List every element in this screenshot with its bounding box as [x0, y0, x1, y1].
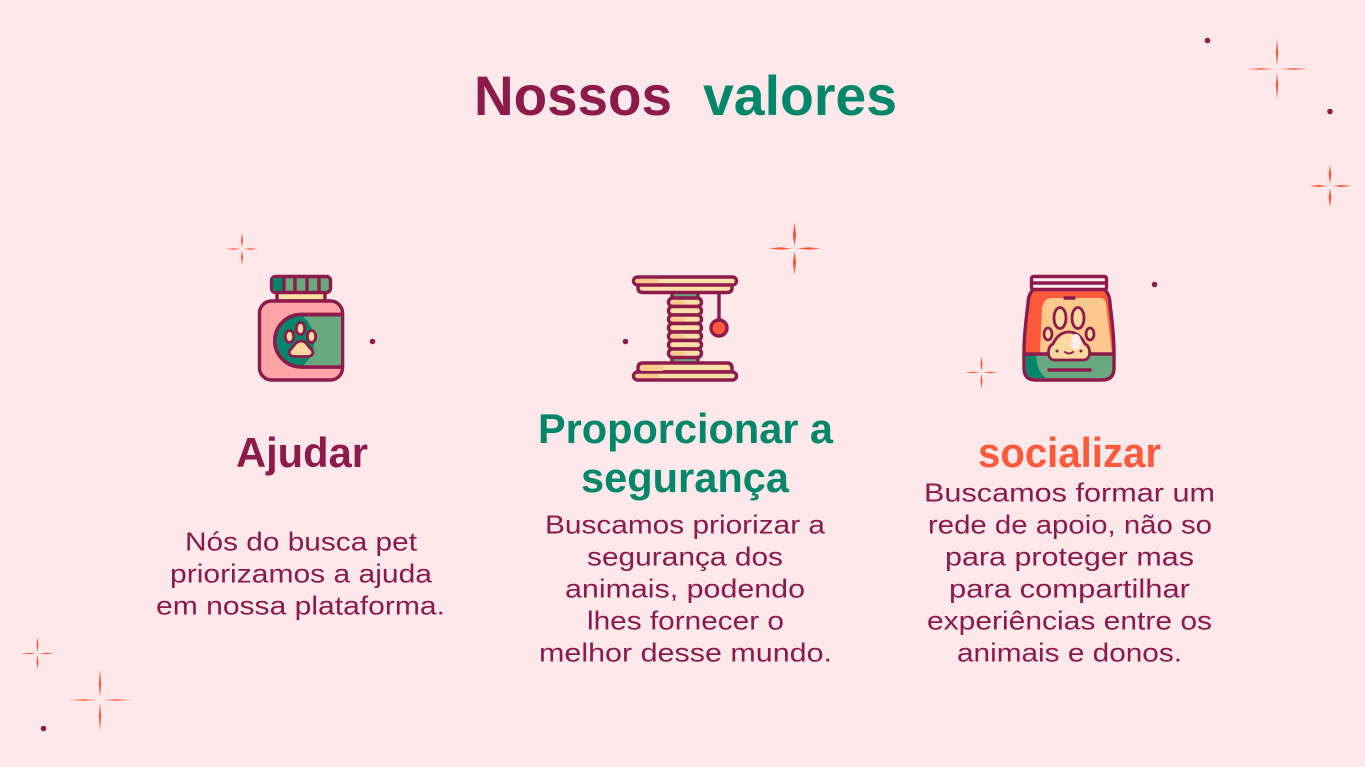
text block: ajudar: priorizamos a ajuda — [170, 558, 433, 588]
icon: cat scratching post — [634, 277, 736, 380]
text block: segurança: segurança dos — [587, 542, 783, 572]
text block: socializar: para compartilhar — [949, 574, 1190, 604]
panel: ajudar — [156, 276, 445, 620]
heading: proporcionar a segurança: Proporcionar a — [538, 405, 834, 452]
text block: socializar: experiências entre os — [927, 606, 1212, 636]
icon: medicine jar with paw — [260, 276, 342, 380]
panel: socializar — [924, 276, 1215, 668]
text block: segurança: animais, podendo — [565, 574, 805, 604]
text block: segurança: Buscamos priorizar a — [545, 510, 826, 540]
text block: socializar: Buscamos formar um — [924, 478, 1215, 508]
title — [474, 64, 897, 127]
heading: ajudar: Ajudar — [236, 429, 368, 476]
text block: ajudar — [156, 526, 445, 620]
text block: ajudar: Nós do busca pet — [185, 526, 418, 556]
text block: socializar: rede de apoio, não so — [928, 510, 1212, 540]
heading: proporcionar a segurança: segurança — [581, 454, 790, 501]
title: valores — [703, 64, 897, 127]
text block: segurança: lhes fornecer o — [587, 606, 784, 636]
text block: segurança: melhor desse mundo. — [539, 638, 832, 668]
heading: socializar: socializar — [978, 429, 1161, 476]
text block: socializar — [924, 478, 1215, 668]
text block: segurança — [539, 510, 832, 668]
heading: proporcionar a segurança — [538, 405, 834, 501]
panel: segurança — [538, 277, 834, 668]
title: Nossos — [474, 64, 672, 127]
text block: socializar: animais e donos. — [957, 638, 1182, 668]
text block: socializar: para proteger mas — [945, 542, 1194, 572]
text block: ajudar: em nossa plataforma. — [156, 590, 445, 620]
icon: pet food bag with paw — [1024, 276, 1114, 380]
